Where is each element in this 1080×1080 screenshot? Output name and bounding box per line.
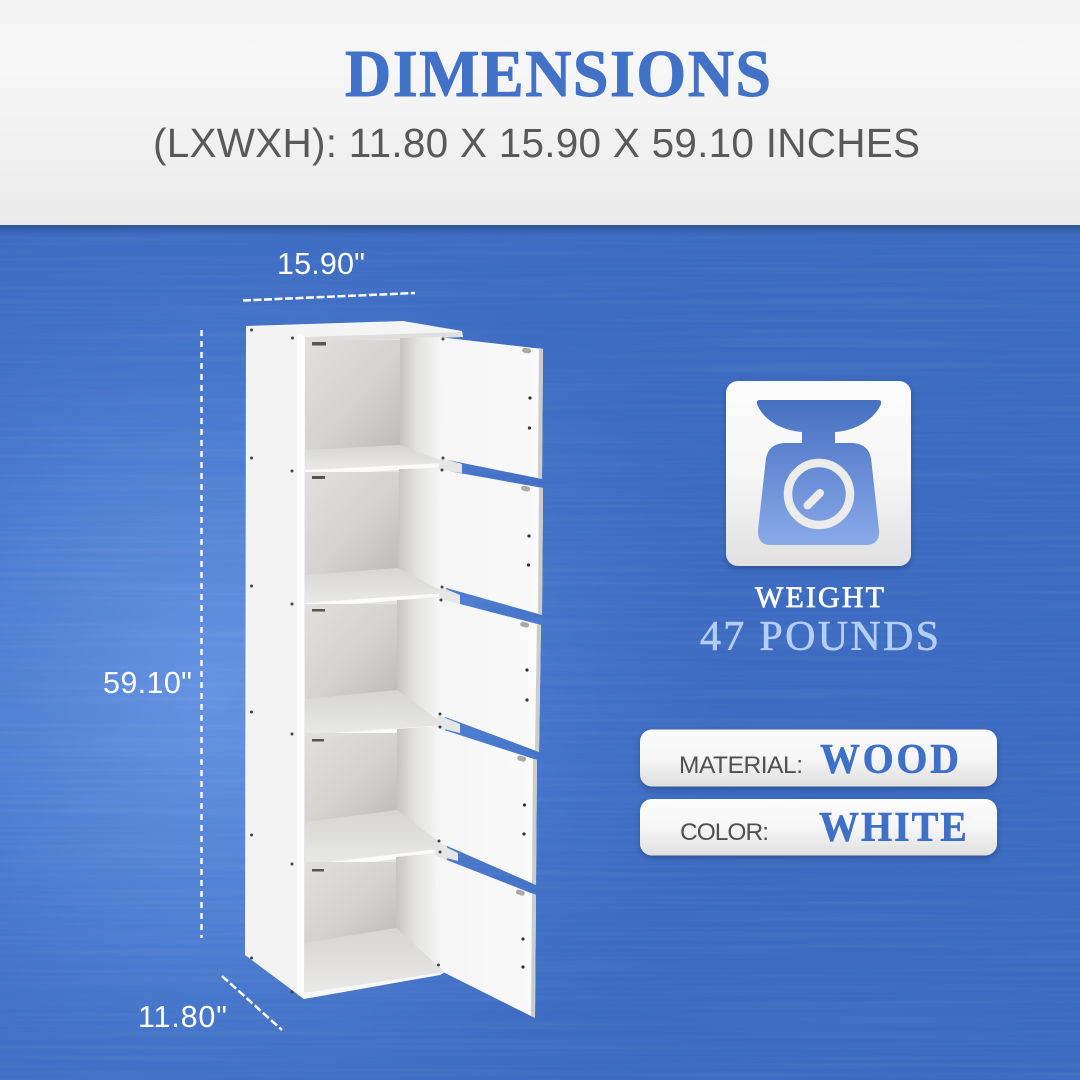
weight label: WEIGHT xyxy=(755,581,884,614)
door 2 xyxy=(437,468,543,615)
title: DIMENSIONS xyxy=(345,38,771,111)
door 5 xyxy=(434,850,536,1018)
depth dimension: 11.80 xyxy=(138,976,282,1034)
compartment 5 xyxy=(304,853,445,999)
door 3 xyxy=(437,598,541,752)
color pill xyxy=(640,799,997,856)
compartment 4 xyxy=(305,726,447,871)
icon: kitchen scale tile xyxy=(726,381,911,566)
white cabinet with open doors xyxy=(245,321,543,1018)
color pill: COLOR: xyxy=(680,819,769,846)
compartment 2 xyxy=(305,468,446,608)
width dimension: 15.90 xyxy=(243,247,415,300)
material pill: MATERIAL: xyxy=(679,752,803,779)
shelf latches xyxy=(312,342,326,872)
compartment 3 xyxy=(305,598,445,740)
material pill xyxy=(640,730,997,786)
hinge connectors between doors xyxy=(434,458,462,861)
width dimension: 15.90: 15.90" xyxy=(277,247,365,281)
cabinet backing xyxy=(304,337,448,998)
blue textured background xyxy=(0,225,1080,1080)
weight value: 47 POUNDS xyxy=(700,614,939,660)
color pill: WHITE xyxy=(819,803,967,850)
header band xyxy=(0,0,1080,225)
left side panel xyxy=(245,326,305,999)
material pill: WOOD xyxy=(820,735,959,782)
height dimension: 59.10: 59.10" xyxy=(103,666,192,700)
weight panel xyxy=(700,381,939,660)
door 4 xyxy=(435,726,537,885)
depth dimension: 11.80: 11.80" xyxy=(138,1000,227,1034)
door 1 xyxy=(439,337,543,479)
top panel xyxy=(246,321,463,342)
subtitle: dimensions: (LXWXH): 11.80 X 15.90 X 59.10 INCHES xyxy=(153,120,920,166)
compartment 1 xyxy=(305,337,448,476)
